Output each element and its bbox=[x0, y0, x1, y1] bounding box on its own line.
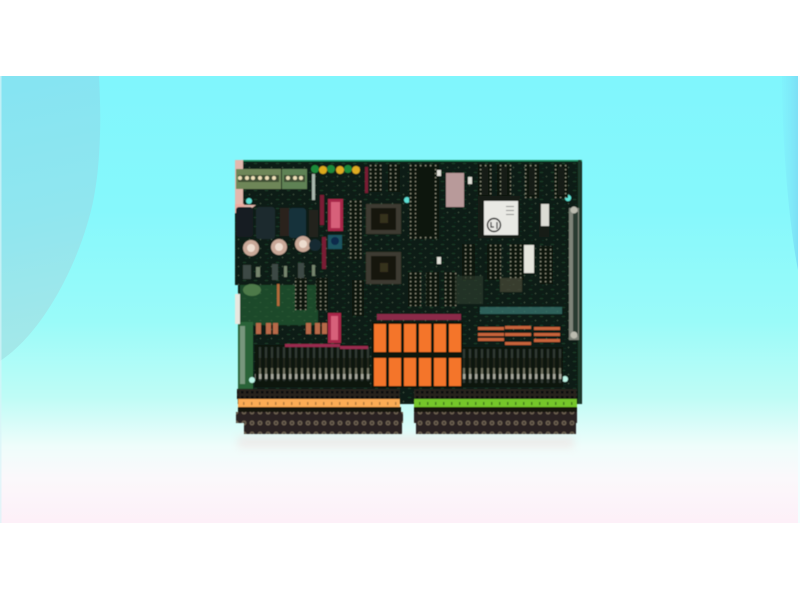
lower left lighter green zone bbox=[240, 285, 318, 325]
small vertical component bbox=[312, 174, 315, 200]
corner cutout: power area bbox=[235, 160, 256, 211]
board substrate bbox=[235, 160, 582, 404]
green terminal strip bbox=[414, 399, 577, 407]
blue trimmer bbox=[328, 235, 342, 249]
orange relays bbox=[374, 324, 461, 386]
white chip labels right bbox=[524, 203, 549, 273]
round capacitors bbox=[243, 236, 321, 256]
edge connector bbox=[569, 206, 579, 340]
terminal connectors bbox=[236, 169, 307, 189]
orange terminal strip bbox=[238, 399, 400, 407]
cyan backdrop bbox=[0, 76, 800, 523]
circuit board bbox=[235, 160, 582, 404]
left terminal block bbox=[236, 389, 403, 434]
PLCC processors bbox=[366, 204, 401, 284]
dark gaps behind relays bbox=[372, 322, 463, 388]
teal SMD row and orange resistor networks bbox=[455, 276, 562, 345]
maroon header strip over relays bbox=[377, 314, 461, 320]
right terminal block bbox=[414, 389, 577, 434]
small white labels bbox=[437, 170, 472, 264]
coiled wiring banks bbox=[255, 344, 563, 387]
DIP chip rows bbox=[295, 164, 568, 316]
small parts below capacitors bbox=[243, 263, 315, 280]
silver memory chip bbox=[446, 173, 464, 207]
DIP switches bbox=[320, 167, 368, 343]
mounting holes bbox=[246, 195, 571, 383]
UL certification label bbox=[478, 196, 520, 238]
small components row left bbox=[256, 323, 327, 334]
status LEDs bbox=[311, 165, 360, 174]
large capacitors bbox=[236, 207, 318, 239]
